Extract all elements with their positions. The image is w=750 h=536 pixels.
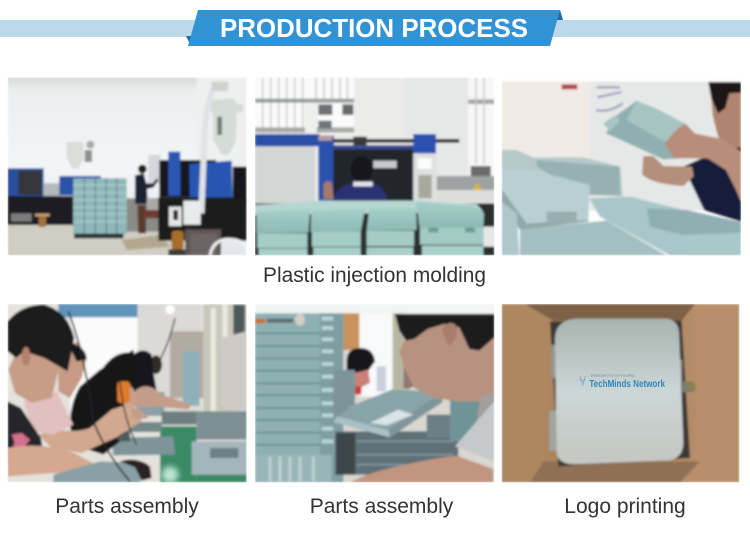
title banner [186,10,563,46]
caption: logo printing: Logo printing [564,495,686,518]
logo on enclosure: Dedicated to Connecting [591,372,634,377]
photo: factory floor with injection machines [8,77,247,255]
header ribbon band [0,20,750,37]
caption: parts assembly center: Parts assembly [310,495,454,518]
photo: stacked enclosures with worker close-up [255,304,494,482]
caption: plastic injection molding: Plastic injection molding [263,264,486,287]
title text: PRODUCTION PROCESS [220,15,528,43]
logo on enclosure: TechMinds Network [589,379,665,390]
caption: parts assembly left: Parts assembly [55,495,199,518]
photo: logo printed enclosure in cardboard box [502,304,739,482]
photo: workers assembling on the line [8,304,247,483]
logo on enclosure [579,374,665,387]
photo: worker inspecting molded enclosure [502,77,741,255]
photo: operator at injection molding machine [255,77,494,255]
